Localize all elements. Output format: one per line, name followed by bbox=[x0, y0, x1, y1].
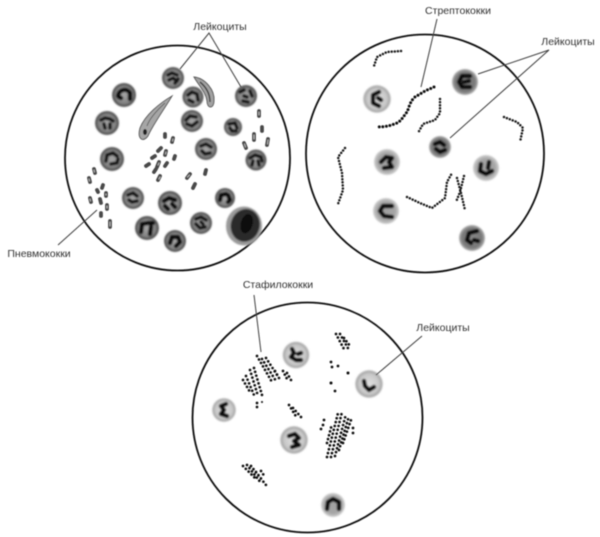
leukocyte bbox=[280, 426, 308, 454]
leukocyte bbox=[321, 493, 345, 517]
pneumococci: left group bbox=[89, 169, 110, 227]
microscope field circle bbox=[192, 302, 422, 532]
label: streptococci: Стрептококки bbox=[425, 5, 491, 17]
leukocyte bbox=[95, 111, 119, 135]
leukocytes group bbox=[363, 69, 499, 251]
large dark monocyte bbox=[226, 206, 264, 246]
leukocyte bbox=[452, 69, 478, 95]
pneumococci: middle group bbox=[146, 134, 175, 180]
leukocyte bbox=[158, 191, 182, 215]
staphylococcus clusters bbox=[243, 334, 354, 485]
leukocyte bbox=[164, 230, 186, 252]
leukocyte bbox=[429, 136, 451, 158]
leukocyte bbox=[374, 149, 400, 175]
leader line: staphylococci bbox=[254, 295, 261, 352]
leukocyte bbox=[100, 147, 124, 171]
leader lines: leukocytes bbox=[450, 50, 549, 138]
leukocyte bbox=[363, 85, 391, 113]
label: leukocytes: Лейкоциты bbox=[416, 322, 470, 334]
leukocyte bbox=[459, 225, 485, 251]
leukocyte bbox=[235, 85, 257, 107]
leukocyte bbox=[181, 110, 203, 132]
crescent cell bbox=[194, 77, 214, 107]
leukocyte bbox=[182, 86, 204, 108]
leukocyte bbox=[282, 342, 310, 368]
leukocyte bbox=[355, 370, 383, 398]
microscope field circle bbox=[65, 46, 290, 270]
leader line: leukocytes bbox=[376, 336, 422, 375]
pneumococci: right group bbox=[244, 111, 268, 148]
leukocyte bbox=[122, 187, 144, 209]
pneumococci: small group bbox=[187, 170, 206, 188]
leukocyte bbox=[224, 118, 242, 136]
panel: streptococci field bbox=[306, 5, 595, 272]
leukocyte bbox=[473, 155, 499, 181]
panel: staphylococci field bbox=[192, 279, 470, 532]
label: staphylococci: Стафилококки bbox=[243, 279, 313, 291]
leukocytes group bbox=[212, 342, 383, 517]
leukocyte bbox=[190, 212, 212, 234]
leader line: streptococci bbox=[421, 19, 437, 87]
leukocyte bbox=[162, 67, 184, 89]
leukocyte bbox=[373, 198, 399, 224]
leukocyte bbox=[135, 216, 159, 240]
leader line: pneumococci bbox=[58, 210, 97, 245]
leukocyte bbox=[112, 83, 136, 107]
label: leukocytes: Лейкоциты bbox=[541, 36, 595, 48]
label: leukocytes: Лейкоциты bbox=[193, 21, 247, 33]
leukocyte bbox=[195, 138, 217, 160]
panel: pneumococci field bbox=[7, 21, 290, 270]
spindle cell bbox=[139, 96, 172, 139]
leukocyte bbox=[215, 188, 235, 208]
streptococcus chains bbox=[338, 51, 523, 210]
label: pneumococci: Пневмококки bbox=[7, 248, 71, 260]
leukocyte bbox=[246, 150, 266, 170]
leukocytes group bbox=[95, 67, 266, 252]
leader lines: leukocytes bbox=[180, 33, 241, 87]
microscope field circle bbox=[306, 34, 544, 272]
leukocyte bbox=[212, 398, 236, 422]
